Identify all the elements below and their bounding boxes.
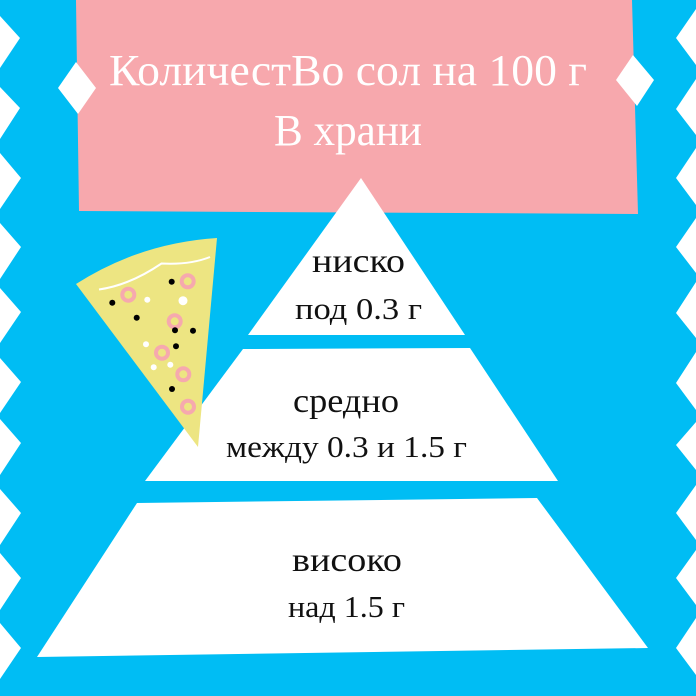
icon: pizza slice (76, 238, 217, 447)
value: low: под 0.3 г (295, 291, 422, 326)
title banner (76, 0, 638, 214)
pyramid tier: low (248, 178, 465, 335)
pyramid tier: medium (145, 348, 558, 481)
label: medium: средно (293, 383, 399, 420)
label: high: високо (292, 542, 402, 579)
value: high: над 1.5 г (288, 589, 405, 624)
value: medium: между 0.3 и 1.5 г (226, 429, 467, 464)
title (109, 46, 587, 155)
title: КоличестВо сол на 100 г (109, 46, 587, 95)
pyramid tier: high (37, 498, 648, 657)
banner right diamond (616, 55, 654, 106)
label: low: ниско (312, 243, 405, 280)
banner left diamond (58, 62, 96, 114)
title: В храни (274, 106, 422, 155)
left zigzag border (0, 16, 21, 679)
right zigzag border (676, 9, 696, 675)
